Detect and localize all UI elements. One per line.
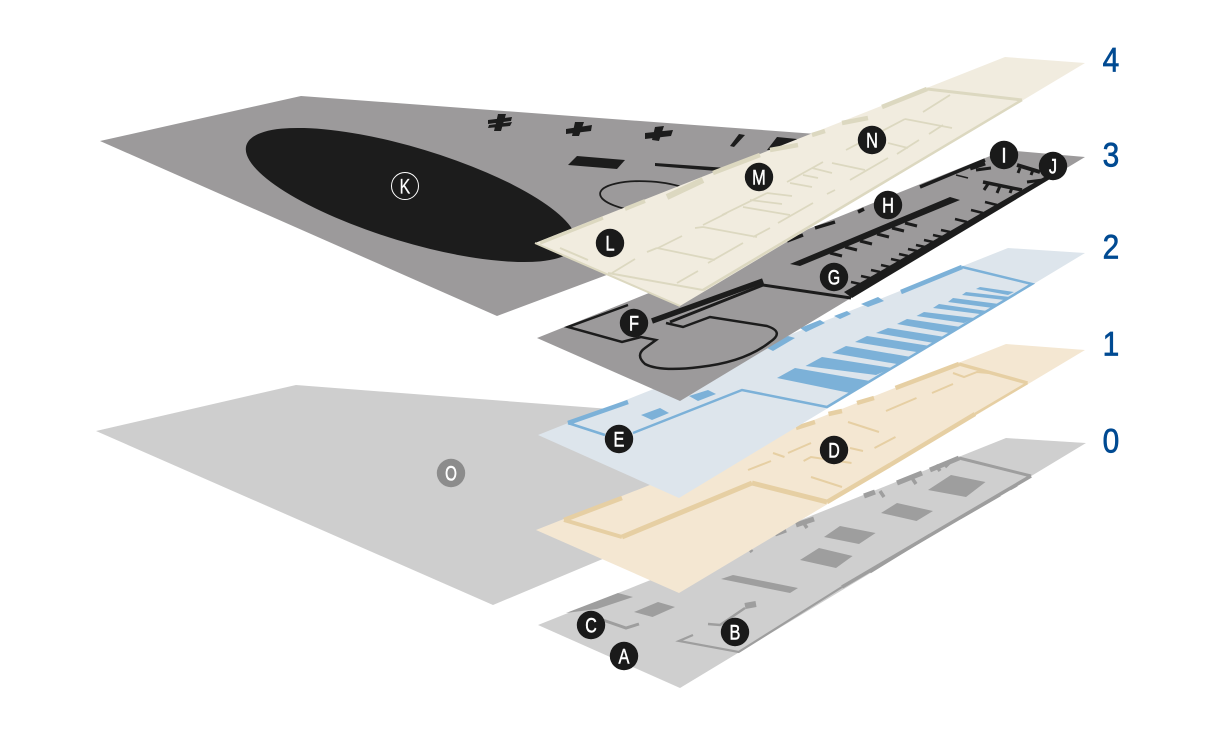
- layer 3: third floor plate: [537, 150, 1085, 401]
- marker D: [820, 436, 848, 464]
- marker H: [874, 191, 902, 219]
- marker O: [437, 459, 465, 487]
- marker L: L: [605, 232, 615, 255]
- marker J: [1039, 152, 1067, 180]
- floor number 2: 2: [1103, 228, 1119, 266]
- marker E: E: [614, 428, 624, 451]
- floor number 0: 0: [1103, 422, 1119, 460]
- teeth under bar: [830, 223, 917, 256]
- marker B: [721, 618, 749, 646]
- teeth along outer wall: [851, 202, 997, 284]
- marker G: G: [828, 265, 840, 289]
- marker C: [577, 611, 605, 639]
- marker A: A: [619, 645, 630, 668]
- marker K: [392, 172, 418, 200]
- marker K: K: [400, 174, 411, 198]
- marker G: [820, 263, 848, 291]
- marker O: O: [445, 461, 457, 485]
- marker H: H: [882, 194, 894, 217]
- marker A: [610, 642, 638, 670]
- marker I: I: [1001, 145, 1007, 168]
- plate K: third floor roof with oval: [100, 96, 830, 316]
- layer 4: top floor plate: [535, 57, 1085, 306]
- marker D: D: [828, 438, 840, 462]
- marker C: C: [585, 613, 597, 637]
- marker F: F: [629, 312, 639, 335]
- floor number 4: 4: [1103, 41, 1119, 79]
- floor number 3: 3: [1103, 136, 1119, 174]
- layer 0: ground floor plate: [538, 438, 1086, 688]
- marker M: M: [752, 166, 766, 189]
- marker E: [605, 425, 633, 453]
- floor number 1: 1: [1103, 325, 1119, 363]
- marker L: [596, 229, 624, 257]
- marker M: [745, 163, 773, 191]
- marker B: B: [730, 621, 740, 644]
- marker J: J: [1049, 155, 1057, 178]
- oval K: [233, 100, 589, 290]
- rooftop marks: [488, 114, 797, 216]
- marker N: [858, 126, 886, 154]
- marker F: [620, 309, 648, 337]
- layer 2: second floor plate: [538, 248, 1085, 498]
- layer 1: first floor plate: [536, 344, 1085, 593]
- marker I: [990, 141, 1018, 169]
- marker N: N: [866, 129, 878, 152]
- plate O: light grey site plan: [96, 385, 660, 605]
